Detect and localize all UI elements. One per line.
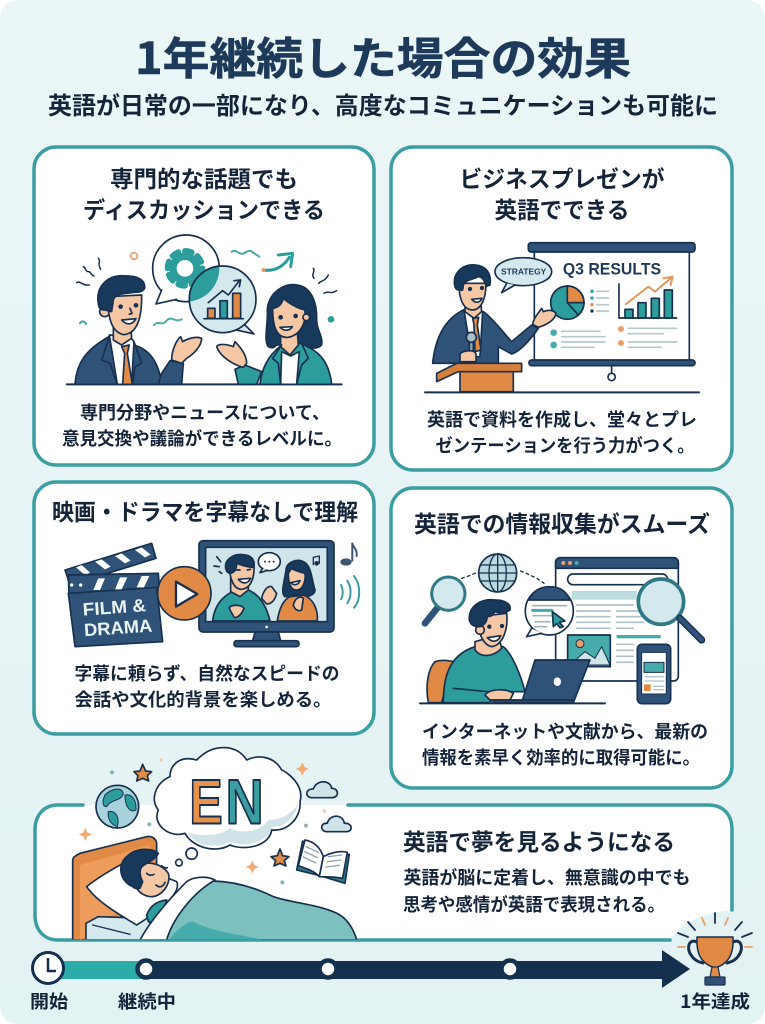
illustration: clapperboard and TV: FILM & (82, 595, 147, 620)
illustration: presenter with screen (425, 243, 699, 392)
milestone node (138, 960, 154, 978)
heading: ビジネスプレゼンが (460, 160, 664, 194)
card background (35, 805, 732, 940)
card outline (34, 147, 374, 465)
icon: trophy (678, 913, 752, 985)
icon: clock start (32, 952, 64, 984)
timeline (30, 913, 752, 1014)
heading line 2: ディスカッションできる (83, 191, 325, 225)
panel: information gathering (391, 488, 732, 788)
illustration: clapperboard and TV (65, 541, 359, 647)
heading: 英語での情報収集がスムーズ (414, 505, 710, 539)
body text line 2: 意見交換や議論ができるレベルに。 (62, 425, 342, 451)
panel: film and drama (34, 482, 374, 734)
subtitle: 英語が日常の一部になり、高度なコミュニケーションも可能に (48, 86, 718, 121)
body text: 専門分野やニュースについて、 (80, 399, 330, 425)
illustration: clapperboard and TV: DRAMA (83, 616, 153, 640)
body text: 字幕に頼らず、自然なスピードの (74, 660, 340, 686)
illustration: sleeping person with dream cloud (73, 748, 357, 940)
body text line 2: ゼンテーションを行う力がつく。 (436, 432, 694, 458)
label: start: 開始 (30, 988, 68, 1014)
title: 1年継続した場合の効果 (135, 23, 631, 87)
body text line 2: 思考や感情が英語で表現される。 (403, 891, 665, 917)
heading: 映画・ドラマを字幕なしで理解 (52, 493, 358, 527)
illustration: man researching on laptop (420, 554, 702, 704)
illustration: sleeping person with dream cloud: N (226, 767, 264, 837)
body text: 英語で資料を作成し、堂々とプレ (427, 406, 697, 432)
panel: dreaming in English (35, 748, 732, 940)
illustration: sleeping person with dream cloud: E (189, 767, 223, 837)
card outline with gap (35, 805, 732, 940)
card outline (391, 488, 732, 788)
milestone node (320, 960, 336, 978)
timeline arrow (146, 950, 690, 988)
timeline bar: elapsed (60, 961, 150, 979)
heading line 2: 英語でできる (494, 191, 630, 225)
card outline (391, 147, 732, 470)
panel: business presentation (391, 147, 732, 470)
panel: discussion (34, 147, 374, 465)
illustration: two people discussing (67, 235, 342, 384)
card outline (34, 482, 374, 734)
body text line 2: 会話や文化的背景を楽しめる。 (74, 686, 332, 712)
heading: 英語で夢を見るようになる (403, 823, 675, 857)
milestone node (502, 960, 518, 978)
illustration: presenter with screen: Q3 RESULTS (563, 259, 661, 278)
body text line 2: 情報を素早く効率的に取得可能に。 (422, 744, 700, 770)
illustration: presenter with screen: STRATEGY (501, 267, 547, 277)
label: one year achieved: 1年達成 (680, 988, 750, 1014)
label: ongoing: 継続中 (118, 988, 176, 1014)
heading: 専門的な話題でも (110, 160, 298, 194)
body text: インターネットや文献から、最新の (422, 718, 708, 744)
body text: 英語が脳に定着し、無意識の中でも (404, 864, 690, 890)
